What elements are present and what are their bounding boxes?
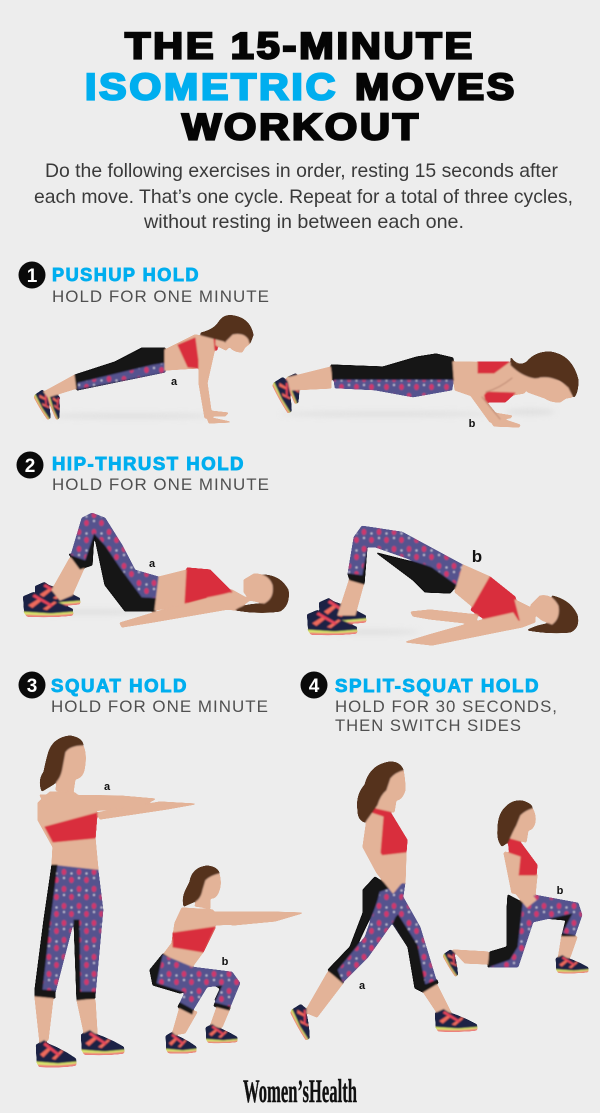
intro text: each move. That’s one cycle. Repeat for a total of three cycles,: [34, 186, 573, 208]
figure: squat b: [150, 866, 302, 1053]
logo: Women's Health: Women’sHealth: [243, 1074, 357, 1110]
title: ISOMETRIC: [85, 66, 338, 108]
heading: exercise 1: [18, 262, 270, 306]
heading: exercise 4: SPLIT-SQUAT HOLD: [335, 675, 540, 696]
heading: exercise 3: SQUAT HOLD: [51, 675, 188, 696]
heading: exercise 3: [18, 672, 269, 716]
label: a: a: [104, 781, 111, 793]
label: a: a: [171, 376, 178, 388]
heading: exercise 4: 4: [309, 676, 320, 697]
label: b: b: [557, 885, 564, 897]
intro text: Do the following exercises in order, resting 15 seconds after: [45, 160, 558, 182]
title: THE 15-MINUTE: [125, 26, 475, 66]
label: b: b: [472, 547, 482, 566]
figure: split squat a: [289, 762, 478, 1041]
label: b: b: [222, 956, 229, 968]
heading: exercise 2: HIP-THRUST HOLD: [52, 453, 245, 474]
heading: exercise 3: HOLD FOR ONE MINUTE: [51, 698, 269, 716]
heading: exercise 2: HOLD FOR ONE MINUTE: [52, 476, 270, 494]
heading: exercise 1: PUSHUP HOLD: [52, 264, 200, 285]
figure: pushup b: [271, 352, 578, 427]
figure: hip thrust b: [307, 526, 578, 645]
label: a: a: [359, 980, 366, 992]
figure: hip thrust a: [23, 513, 288, 627]
heading: exercise 1: HOLD FOR ONE MINUTE: [52, 288, 270, 306]
heading: exercise 2: 2: [25, 456, 35, 477]
intro text: without resting in between each one.: [143, 211, 464, 233]
heading: exercise 2: [16, 452, 270, 494]
heading: exercise 4: THEN SWITCH SIDES: [335, 717, 522, 735]
heading: exercise 4: [300, 672, 558, 735]
intro text: [34, 160, 573, 233]
title: WORKOUT: [182, 106, 421, 148]
figure: pushup a: [32, 316, 253, 423]
label: b: b: [469, 418, 476, 430]
title: [85, 26, 517, 148]
heading: exercise 4: HOLD FOR 30 SECONDS,: [335, 698, 558, 716]
figure: squat a: [35, 736, 195, 1067]
heading: exercise 1: 1: [27, 266, 38, 287]
label: a: a: [149, 558, 156, 570]
figure: split squat b: [442, 801, 589, 977]
title: MOVES: [355, 66, 517, 108]
heading: exercise 3: 3: [27, 676, 37, 697]
